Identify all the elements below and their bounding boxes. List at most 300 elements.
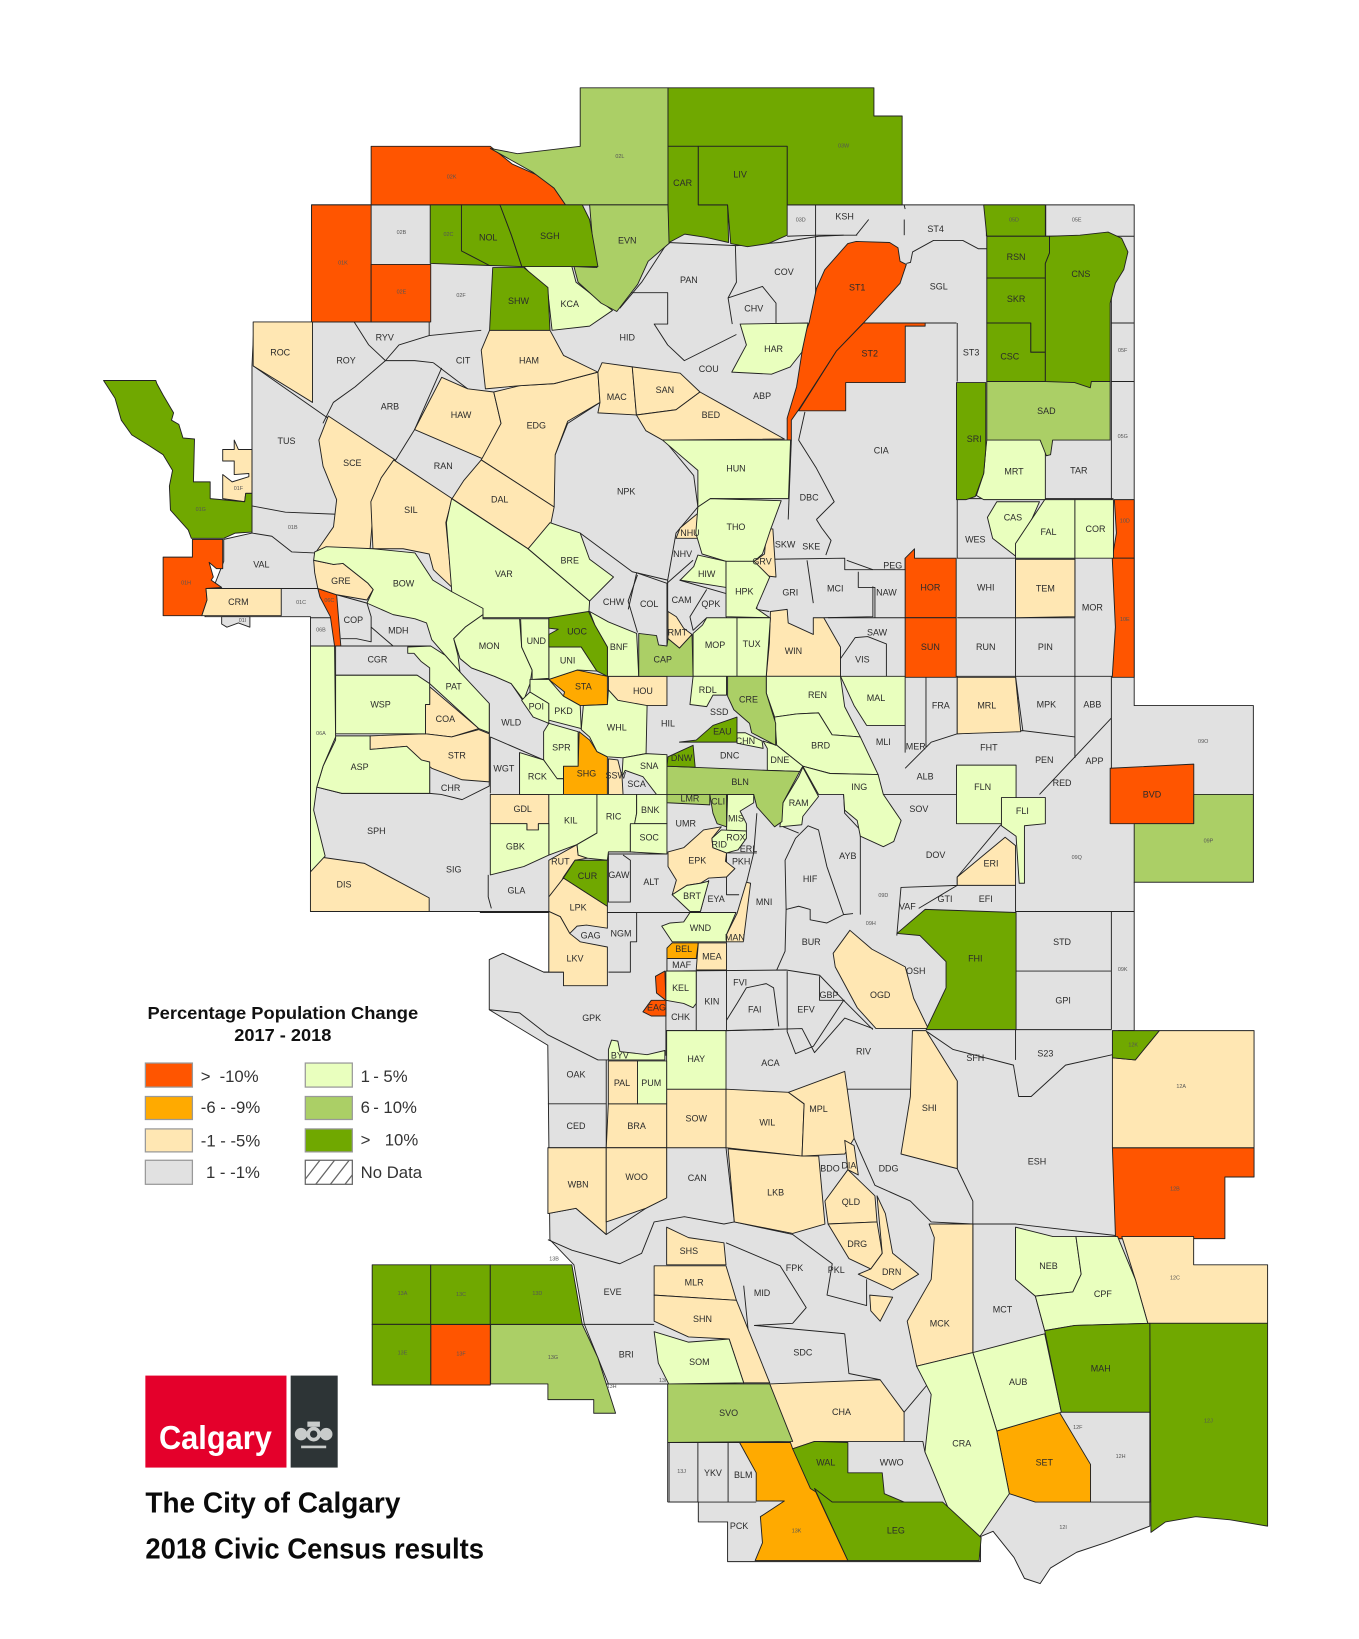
community code labels: RED bbox=[1053, 778, 1072, 788]
community code labels: CHV bbox=[744, 303, 763, 313]
community code labels: CAP bbox=[654, 655, 672, 665]
small area code labels: 13D bbox=[532, 1291, 542, 1297]
community code labels: CHK bbox=[671, 1012, 690, 1022]
community code labels: MPL bbox=[809, 1104, 828, 1114]
community code labels: MPK bbox=[1037, 700, 1056, 710]
small area code labels bbox=[181, 143, 1214, 1534]
community code labels: QLD bbox=[842, 1197, 861, 1207]
small area code labels: 09K bbox=[1118, 967, 1128, 973]
community code labels: ROC bbox=[270, 347, 291, 357]
community code labels: GPK bbox=[582, 1013, 601, 1023]
map base: communities with 1 to -1% change bbox=[205, 205, 1253, 1584]
community code labels: GBK bbox=[506, 842, 525, 852]
community code labels: UMR bbox=[676, 819, 697, 829]
small area code labels: 13H bbox=[607, 1384, 617, 1390]
community code labels: GLA bbox=[507, 886, 525, 896]
community code labels: ASP bbox=[351, 762, 369, 772]
community code labels: SKR bbox=[1007, 294, 1026, 304]
small area code labels: 03W bbox=[838, 143, 850, 149]
small area code labels: 12J bbox=[1204, 1419, 1213, 1425]
community code labels: HAW bbox=[451, 410, 472, 420]
community code labels: TUX bbox=[743, 639, 761, 649]
community code labels: GRV bbox=[752, 556, 772, 566]
community code labels: SPH bbox=[367, 826, 386, 836]
community code labels: HPK bbox=[735, 587, 754, 597]
small area code labels: 09Q bbox=[1072, 855, 1082, 861]
title bbox=[145, 1487, 484, 1565]
community code labels: PAN bbox=[680, 275, 698, 285]
community code labels: HUN bbox=[726, 463, 746, 473]
community code labels: ALB bbox=[917, 772, 934, 782]
community code labels: OGD bbox=[870, 990, 891, 1000]
small area code labels: 01G bbox=[196, 507, 206, 513]
community code labels: DIS bbox=[336, 879, 351, 889]
community code labels: MOP bbox=[705, 640, 725, 650]
community code labels: VAL bbox=[253, 559, 270, 569]
community code labels: STD bbox=[1053, 937, 1072, 947]
community code labels: ST3 bbox=[963, 347, 979, 357]
community code labels: CRA bbox=[952, 1439, 971, 1449]
community code labels: SOW bbox=[686, 1113, 707, 1123]
community code labels: SHI bbox=[922, 1103, 937, 1113]
community code labels: RIC bbox=[606, 811, 622, 821]
legend labels: -1 - -5% bbox=[201, 1132, 260, 1151]
community code labels: ERI bbox=[984, 858, 998, 868]
community code labels: FVI bbox=[733, 978, 747, 988]
community code labels: BUR bbox=[802, 937, 821, 947]
communities: more than 10% population decline bbox=[163, 146, 1254, 1385]
community code labels: ABP bbox=[753, 391, 771, 401]
community code labels: BDO bbox=[820, 1164, 840, 1174]
community code labels: SKE bbox=[802, 542, 820, 552]
community code labels: SSW bbox=[606, 771, 626, 781]
small area code labels: 06A bbox=[316, 731, 326, 737]
community code labels: CHA bbox=[832, 1407, 851, 1417]
community code labels: HOU bbox=[633, 686, 653, 696]
community code labels: NEB bbox=[1039, 1261, 1058, 1271]
community code labels: HID bbox=[620, 333, 635, 343]
small area code labels: 13I bbox=[659, 1378, 667, 1384]
community code labels: FLI bbox=[1016, 806, 1029, 816]
community code labels: BED bbox=[702, 410, 721, 420]
community code labels: UNI bbox=[560, 656, 575, 666]
community code labels: LEG bbox=[887, 1525, 905, 1535]
legend labels: > bbox=[361, 1131, 370, 1150]
community code labels: DAL bbox=[491, 495, 508, 505]
community code labels: HOR bbox=[920, 582, 941, 592]
community code labels: EYA bbox=[707, 894, 725, 904]
logo wordmark: Calgary bbox=[159, 1420, 272, 1457]
community code labels: COV bbox=[774, 267, 794, 277]
community code labels: BLN bbox=[731, 777, 749, 787]
community code labels: LIV bbox=[733, 170, 747, 180]
community code labels: VIS bbox=[855, 655, 870, 665]
small area code labels: 12A bbox=[1176, 1084, 1186, 1090]
community boundaries bbox=[252, 205, 1150, 1502]
community code labels: NAW bbox=[876, 588, 897, 598]
community code labels: NOL bbox=[479, 232, 497, 242]
communities: 1 to 5% change bbox=[311, 267, 1148, 1538]
community code labels: CIA bbox=[874, 446, 889, 456]
community code labels: PKH bbox=[732, 856, 750, 866]
community code labels: WIL bbox=[759, 1118, 775, 1128]
community code labels: EDG bbox=[527, 420, 546, 430]
community code labels: RIV bbox=[856, 1047, 871, 1057]
community code labels: MLI bbox=[876, 737, 891, 747]
small area code labels: 03D bbox=[796, 218, 806, 224]
community code labels: S23 bbox=[1037, 1049, 1053, 1059]
legend bbox=[145, 1003, 423, 1184]
community code labels: MAL bbox=[867, 693, 885, 703]
community code labels: NPK bbox=[617, 486, 635, 496]
small area code labels: 12I bbox=[1059, 1525, 1067, 1531]
legend labels: 6 bbox=[361, 1098, 370, 1117]
community code labels: CGR bbox=[367, 655, 388, 665]
community code labels: BRA bbox=[627, 1121, 646, 1131]
community code labels: MOR bbox=[1082, 602, 1103, 612]
community code labels: SET bbox=[1036, 1457, 1054, 1467]
legend labels: > bbox=[201, 1067, 211, 1086]
community code labels: EAG bbox=[647, 1003, 666, 1013]
communities: more than 10% growth bbox=[104, 88, 1268, 1561]
legend labels: -6 - -9% bbox=[201, 1098, 260, 1117]
community code labels: DNC bbox=[720, 751, 740, 761]
community code labels: SUN bbox=[921, 642, 940, 652]
community code labels: RYV bbox=[376, 333, 394, 343]
community code labels: SCE bbox=[343, 458, 362, 468]
community code labels: BRT bbox=[683, 891, 701, 901]
legend title: 2017 - 2018 bbox=[234, 1025, 332, 1045]
logo: City of Calgary bbox=[145, 1376, 338, 1468]
community code labels: COA bbox=[436, 714, 455, 724]
community code labels: RAN bbox=[434, 461, 453, 471]
community code labels: HIF bbox=[803, 874, 818, 884]
communities: 6 to 10% change bbox=[490, 88, 1253, 1442]
community code labels: HIW bbox=[698, 569, 716, 579]
community code labels: PAT bbox=[446, 682, 462, 692]
community code labels: CHW bbox=[603, 597, 625, 607]
legend labels bbox=[201, 1067, 423, 1182]
community code labels: KSH bbox=[835, 211, 854, 221]
legend labels: - 10% bbox=[373, 1098, 417, 1117]
community code labels: HIL bbox=[661, 718, 675, 728]
community code labels: RCK bbox=[528, 772, 547, 782]
community code labels: GTI bbox=[938, 894, 952, 904]
community code labels: PKD bbox=[554, 706, 573, 716]
community code labels: NGM bbox=[610, 928, 631, 938]
small area code labels: 13K bbox=[792, 1528, 802, 1534]
community code labels: SFH bbox=[966, 1053, 984, 1063]
small area code labels: 01I bbox=[239, 618, 246, 624]
small area code labels: 12H bbox=[1116, 1454, 1126, 1460]
community code labels: OSH bbox=[906, 966, 925, 976]
small area code labels: 12C bbox=[1170, 1275, 1180, 1281]
legend labels: -10% bbox=[220, 1067, 259, 1086]
community code labels: GPI bbox=[1055, 995, 1071, 1005]
community code labels: THO bbox=[726, 522, 745, 532]
community code labels: TAR bbox=[1070, 465, 1088, 475]
community code labels: SGL bbox=[930, 281, 948, 291]
community code labels: MCT bbox=[993, 1305, 1013, 1315]
community code labels: KEL bbox=[672, 983, 689, 993]
community code labels: ABB bbox=[1083, 700, 1101, 710]
community code labels: WBN bbox=[568, 1179, 589, 1189]
small area code labels: 13F bbox=[456, 1352, 466, 1358]
small area code labels: 13C bbox=[456, 1292, 466, 1298]
community code labels: ING bbox=[851, 782, 867, 792]
community code labels: WSP bbox=[370, 700, 391, 710]
community code labels: FAI bbox=[748, 1005, 761, 1015]
community code labels: ROY bbox=[336, 356, 356, 366]
community code labels: PCK bbox=[730, 1521, 748, 1531]
community code labels: MID bbox=[754, 1288, 771, 1298]
community code labels: MNI bbox=[756, 897, 772, 907]
community code labels: PEN bbox=[1035, 755, 1054, 765]
community code labels: SOM bbox=[689, 1357, 710, 1367]
community code labels: COU bbox=[699, 364, 719, 374]
community code labels: ESH bbox=[1028, 1156, 1046, 1166]
community code labels: CAS bbox=[1004, 512, 1022, 522]
community code labels: SNA bbox=[640, 761, 658, 771]
community code labels: STA bbox=[575, 682, 592, 692]
community code labels: DBC bbox=[800, 493, 819, 503]
community code labels: MER bbox=[906, 741, 926, 751]
community code labels: DDG bbox=[879, 1164, 899, 1174]
community code labels: CPF bbox=[1094, 1289, 1112, 1299]
community code labels: APP bbox=[1085, 756, 1103, 766]
community code labels: ST2 bbox=[862, 348, 878, 358]
community code labels: BOW bbox=[393, 578, 415, 588]
small area code labels: 02K bbox=[447, 175, 457, 181]
community code labels: SVO bbox=[719, 1408, 738, 1418]
community code labels: SAD bbox=[1037, 406, 1056, 416]
community code labels: CAR bbox=[673, 178, 693, 188]
community code labels: DRG bbox=[847, 1239, 867, 1249]
community code labels: BNF bbox=[610, 642, 628, 652]
community code labels: ST1 bbox=[849, 282, 865, 292]
small area code labels: 02C bbox=[444, 232, 454, 238]
community code labels: PEG bbox=[883, 560, 902, 570]
small area code labels: 05D bbox=[1009, 218, 1019, 224]
community code labels: ALT bbox=[643, 877, 660, 887]
small area code labels: 02B bbox=[397, 230, 407, 236]
community code labels: SKW bbox=[775, 540, 796, 550]
community code labels: CRM bbox=[228, 597, 249, 607]
community code labels: POI bbox=[529, 702, 544, 712]
community code labels: MAC bbox=[607, 392, 627, 402]
small area code labels: 06C bbox=[324, 598, 334, 604]
community code labels: HAR bbox=[764, 344, 784, 354]
community code labels: WHL bbox=[607, 723, 627, 733]
community code labels: VAR bbox=[495, 569, 513, 579]
community code labels: WES bbox=[965, 534, 986, 544]
community code labels: WWO bbox=[880, 1457, 904, 1467]
community code labels: SAN bbox=[656, 385, 674, 395]
community code labels: DNW bbox=[671, 753, 693, 763]
community code labels: GAW bbox=[608, 870, 630, 880]
community code labels: SDC bbox=[793, 1348, 813, 1358]
community code labels: GBP bbox=[819, 990, 838, 1000]
small area code labels: 12B bbox=[1170, 1187, 1180, 1193]
community code labels: SPR bbox=[552, 742, 571, 752]
community code labels: SIG bbox=[446, 865, 461, 875]
community code labels: MCK bbox=[930, 1318, 950, 1328]
legend swatches bbox=[145, 1063, 352, 1184]
community code labels: TUS bbox=[278, 436, 295, 446]
small area code labels: 13G bbox=[548, 1355, 558, 1361]
community code labels: SOC bbox=[639, 832, 659, 842]
community code labels: GRE bbox=[331, 576, 351, 586]
community code labels: DOV bbox=[926, 850, 945, 860]
community code labels: CIT bbox=[456, 356, 471, 366]
community code labels: RUN bbox=[976, 642, 995, 652]
community code labels: SIL bbox=[404, 505, 418, 515]
community code labels: UOC bbox=[567, 626, 588, 636]
community code labels: NHV bbox=[673, 549, 692, 559]
community code labels: MRT bbox=[1004, 466, 1024, 476]
community code labels: GDL bbox=[513, 804, 532, 814]
community code labels: MON bbox=[479, 641, 500, 651]
community code labels: KIL bbox=[564, 816, 578, 826]
community code labels: SCA bbox=[627, 779, 646, 789]
community code labels: KCA bbox=[561, 299, 579, 309]
community code labels: LPK bbox=[570, 902, 587, 912]
community code labels: BNK bbox=[641, 805, 659, 815]
small area code labels: 01F bbox=[234, 486, 244, 492]
community code labels: YKV bbox=[704, 1468, 722, 1478]
community code labels: EVN bbox=[618, 235, 636, 245]
small area: 01I outline bbox=[222, 617, 250, 627]
community code labels: EAU bbox=[713, 727, 732, 737]
small area code labels: 13J bbox=[677, 1469, 686, 1475]
community code labels: SHN bbox=[693, 1314, 712, 1324]
community code labels: CSC bbox=[1000, 351, 1020, 361]
community code labels: RUT bbox=[551, 856, 570, 866]
community code labels: QPK bbox=[701, 599, 720, 609]
community code labels: EPK bbox=[688, 855, 706, 865]
community code labels: SSD bbox=[710, 707, 729, 717]
community code labels: BLM bbox=[734, 1470, 752, 1480]
community code labels: SAW bbox=[867, 627, 888, 637]
community code labels: FAL bbox=[1041, 527, 1056, 537]
community code labels: ERL bbox=[740, 844, 757, 854]
community code labels: VAF bbox=[899, 901, 916, 911]
community code labels: CHR bbox=[441, 783, 461, 793]
community code labels: SRI bbox=[967, 434, 982, 444]
small area code labels: 05G bbox=[1118, 434, 1128, 440]
small area code labels: 02F bbox=[456, 293, 466, 299]
community code labels: COL bbox=[640, 599, 658, 609]
small area code labels: 09P bbox=[1204, 838, 1214, 844]
small area code labels: 12F bbox=[1073, 1425, 1083, 1431]
community code labels: WOO bbox=[625, 1172, 648, 1182]
small area code labels: 02L bbox=[615, 154, 624, 160]
community code labels: ST4 bbox=[927, 224, 944, 234]
community code labels: CUR bbox=[578, 871, 598, 881]
community code labels: SHS bbox=[680, 1246, 698, 1256]
icon: city crest bbox=[295, 1422, 332, 1448]
communities: -6 to -9% change bbox=[549, 670, 1091, 1561]
small area code labels: 09H bbox=[866, 921, 876, 927]
community code labels: MIS bbox=[728, 813, 744, 823]
community code labels: WIN bbox=[785, 646, 802, 656]
small area code labels: 05E bbox=[1072, 218, 1082, 224]
community code labels: RDL bbox=[699, 685, 717, 695]
community code labels: CAM bbox=[672, 595, 692, 605]
community code labels: FHI bbox=[968, 954, 983, 964]
community code labels: TEM bbox=[1036, 583, 1055, 593]
legend labels: - 5% bbox=[373, 1067, 408, 1086]
community code labels: KIN bbox=[704, 996, 719, 1006]
community code labels: BRD bbox=[811, 740, 831, 750]
community code labels: HAY bbox=[687, 1054, 705, 1064]
community code labels: RID bbox=[711, 840, 727, 850]
community code labels: CLI bbox=[711, 797, 725, 807]
small area code labels: 01C bbox=[296, 600, 306, 606]
community code labels: SHG bbox=[577, 769, 596, 779]
title: The City of Calgary bbox=[145, 1487, 401, 1519]
legend labels: No Data bbox=[361, 1163, 423, 1182]
community code labels: MEA bbox=[702, 951, 722, 961]
small area code labels: 13E bbox=[398, 1351, 408, 1357]
community code labels: DRN bbox=[882, 1267, 901, 1277]
small area code labels: 13B bbox=[549, 1257, 559, 1263]
small area code labels: 06B bbox=[316, 627, 326, 633]
community code labels: CNS bbox=[1071, 269, 1090, 279]
community code labels bbox=[228, 170, 1162, 1535]
community code labels: FPK bbox=[786, 1263, 803, 1273]
community code labels: CED bbox=[567, 1121, 586, 1131]
community code labels: PAL bbox=[614, 1078, 630, 1088]
small area code labels: 09O bbox=[1198, 739, 1208, 745]
community code labels: CHN bbox=[736, 736, 755, 746]
map of Calgary communities bbox=[104, 88, 1268, 1584]
community code labels: STR bbox=[448, 751, 466, 761]
community code labels: BRE bbox=[561, 555, 579, 565]
community code labels: BEL bbox=[675, 944, 692, 954]
community code labels: DIA bbox=[841, 1160, 856, 1170]
community code labels: BYV bbox=[611, 1051, 629, 1061]
small area code labels: 10E bbox=[1120, 617, 1130, 623]
community code labels: RAM bbox=[789, 798, 809, 808]
community code labels: MLR bbox=[685, 1278, 704, 1288]
community code labels: FLN bbox=[974, 782, 991, 792]
community code labels: EVE bbox=[604, 1287, 622, 1297]
community code labels: AUB bbox=[1009, 1377, 1027, 1387]
community code labels: MAN bbox=[725, 933, 745, 943]
community code labels: MCI bbox=[827, 583, 843, 593]
community code labels: MAF bbox=[672, 960, 692, 970]
community code labels: ACA bbox=[761, 1058, 780, 1068]
title: 2018 Civic Census results bbox=[145, 1533, 484, 1565]
community code labels: MDH bbox=[388, 625, 409, 635]
community code labels: REN bbox=[808, 690, 827, 700]
community code labels: CRE bbox=[739, 694, 758, 704]
legend title bbox=[147, 1003, 418, 1045]
community code labels: UND bbox=[527, 636, 547, 646]
community code labels: OAK bbox=[567, 1070, 585, 1080]
community code labels: FRA bbox=[932, 701, 950, 711]
community code labels: MAH bbox=[1091, 1363, 1111, 1373]
community code labels: COP bbox=[344, 615, 363, 625]
community code labels: LKB bbox=[767, 1188, 784, 1198]
small area code labels: 01H bbox=[181, 580, 191, 586]
community code labels: WLD bbox=[501, 717, 522, 727]
legend title: Percentage Population Change bbox=[147, 1003, 418, 1023]
small area code labels: 13A bbox=[398, 1291, 408, 1297]
community code labels: DNE bbox=[770, 755, 789, 765]
community code labels: RMT bbox=[668, 627, 688, 637]
